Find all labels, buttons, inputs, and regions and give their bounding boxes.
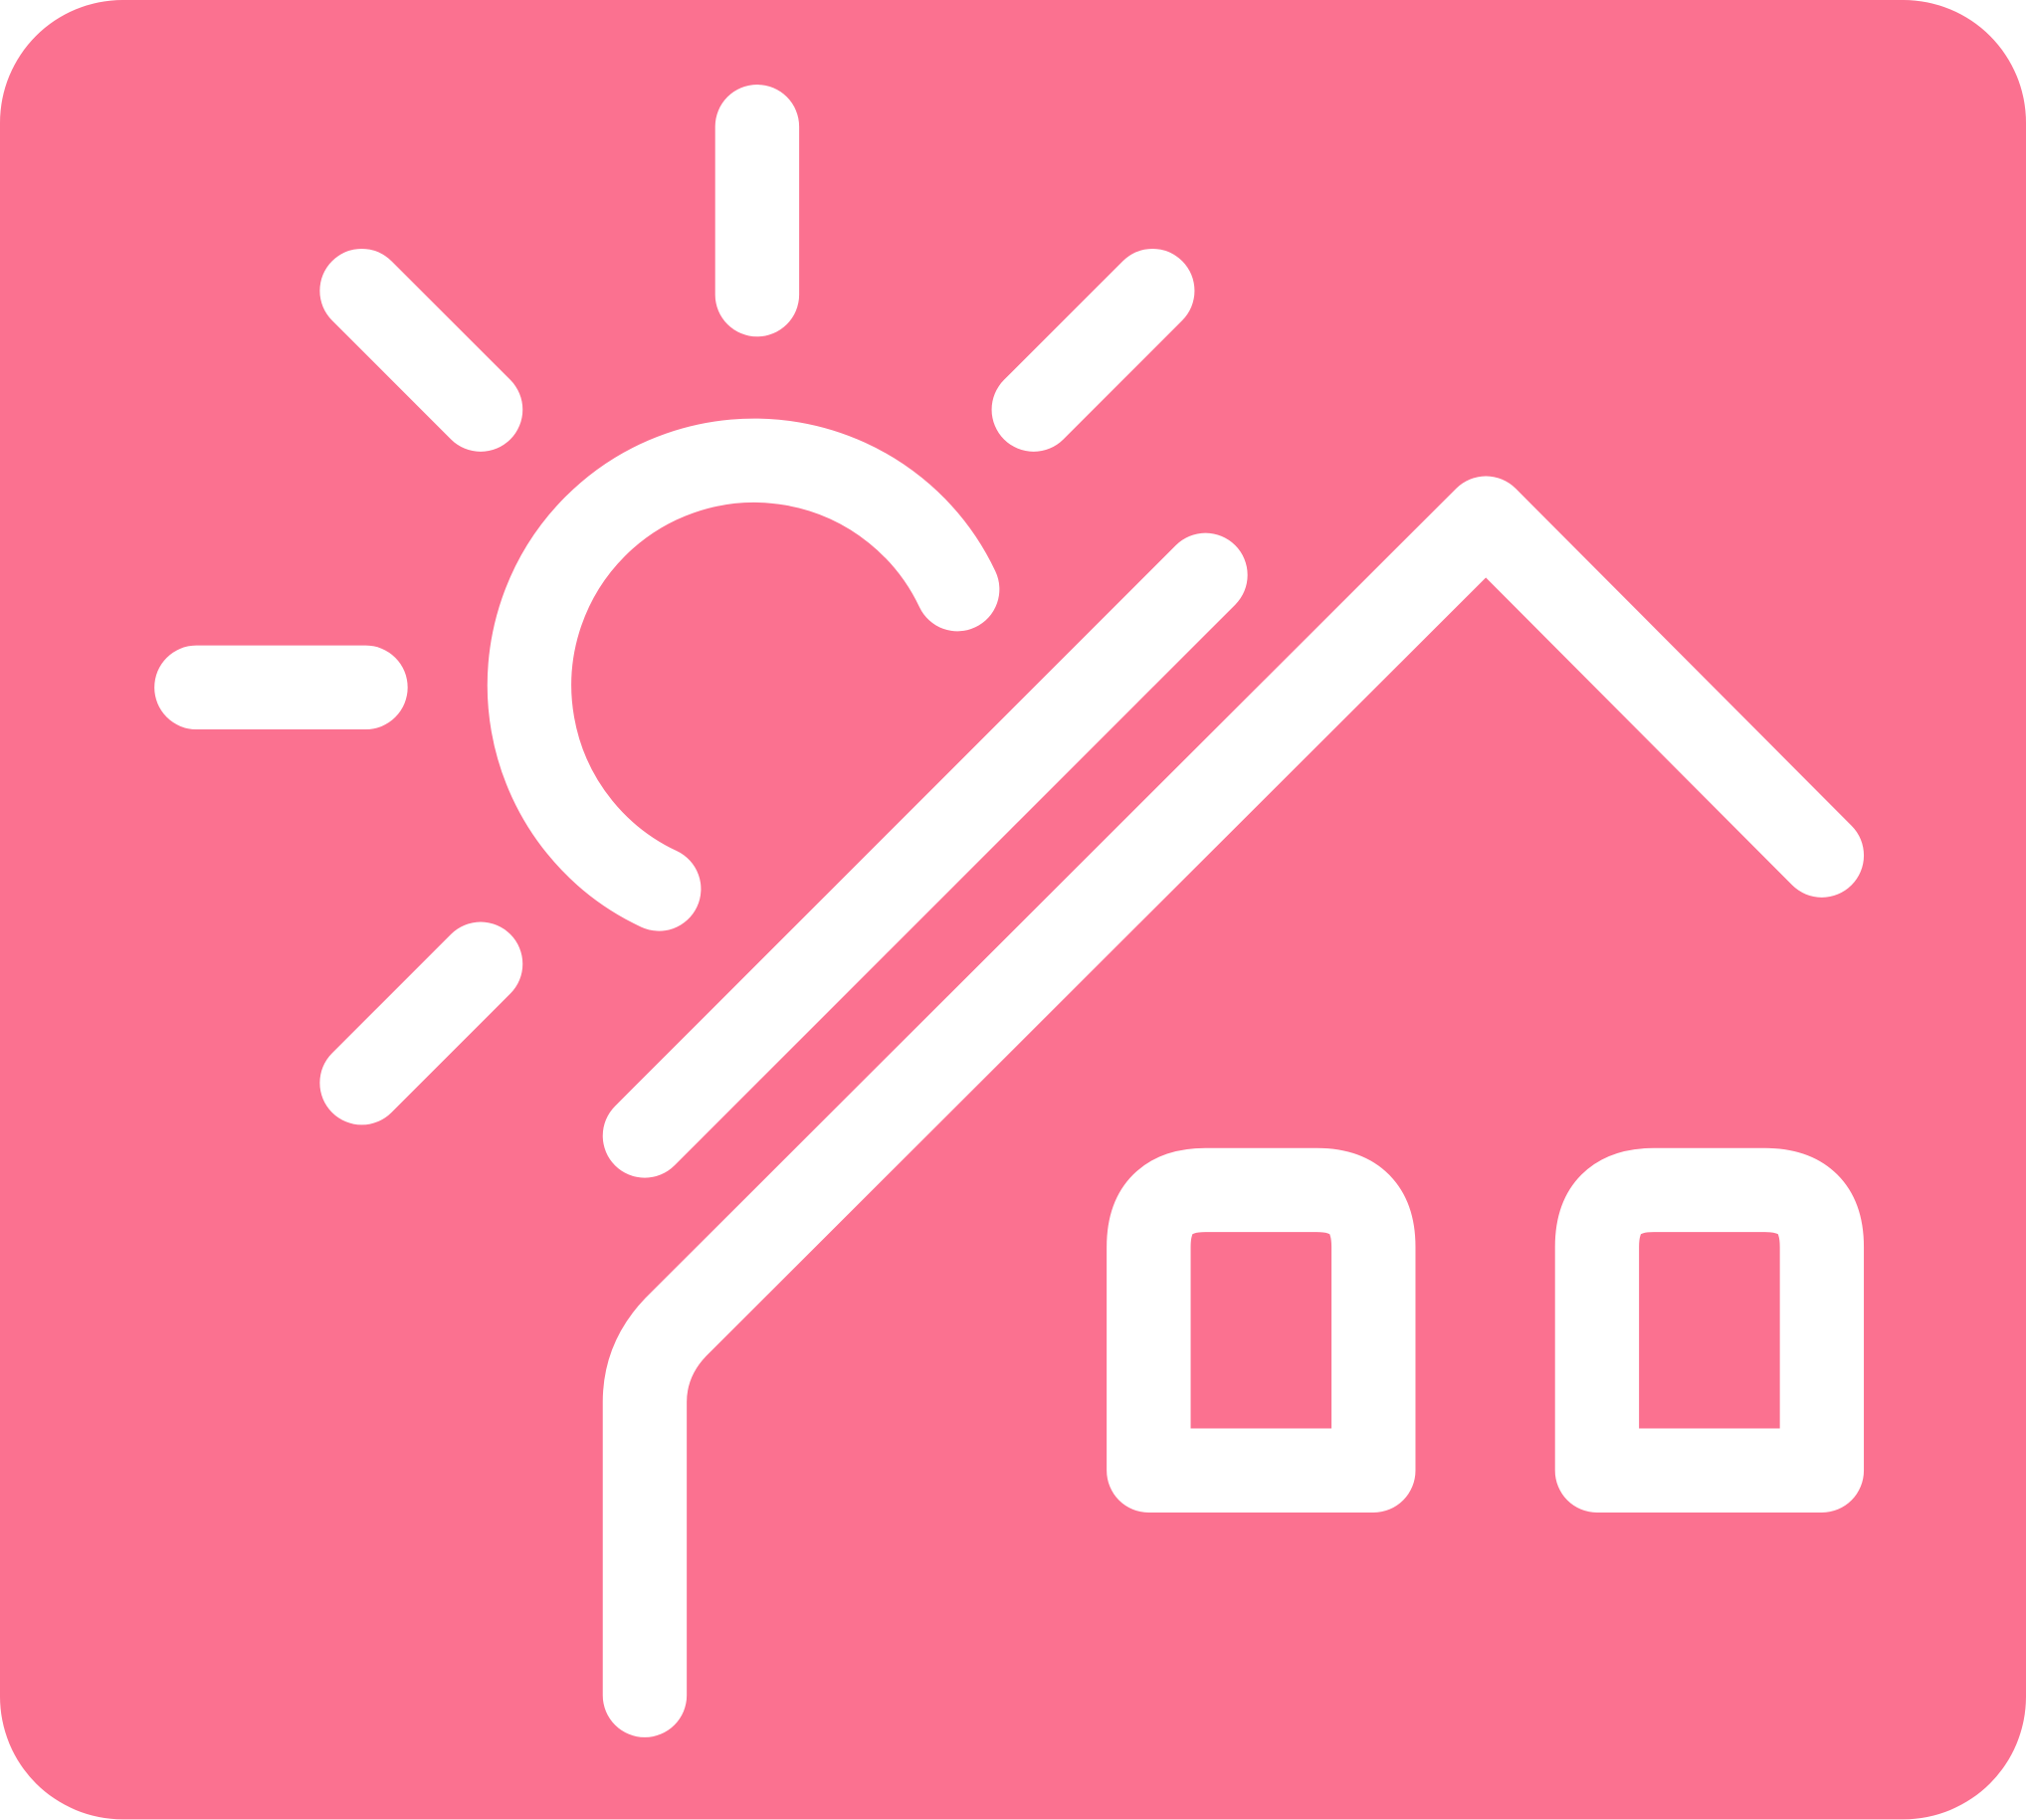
icon: left window [1148,1190,1373,1471]
icon: sun [196,126,1152,1083]
icon: sun beam diagonal [645,575,1205,1135]
icon: house roof [645,518,1822,1696]
icon: right window [1597,1190,1822,1471]
